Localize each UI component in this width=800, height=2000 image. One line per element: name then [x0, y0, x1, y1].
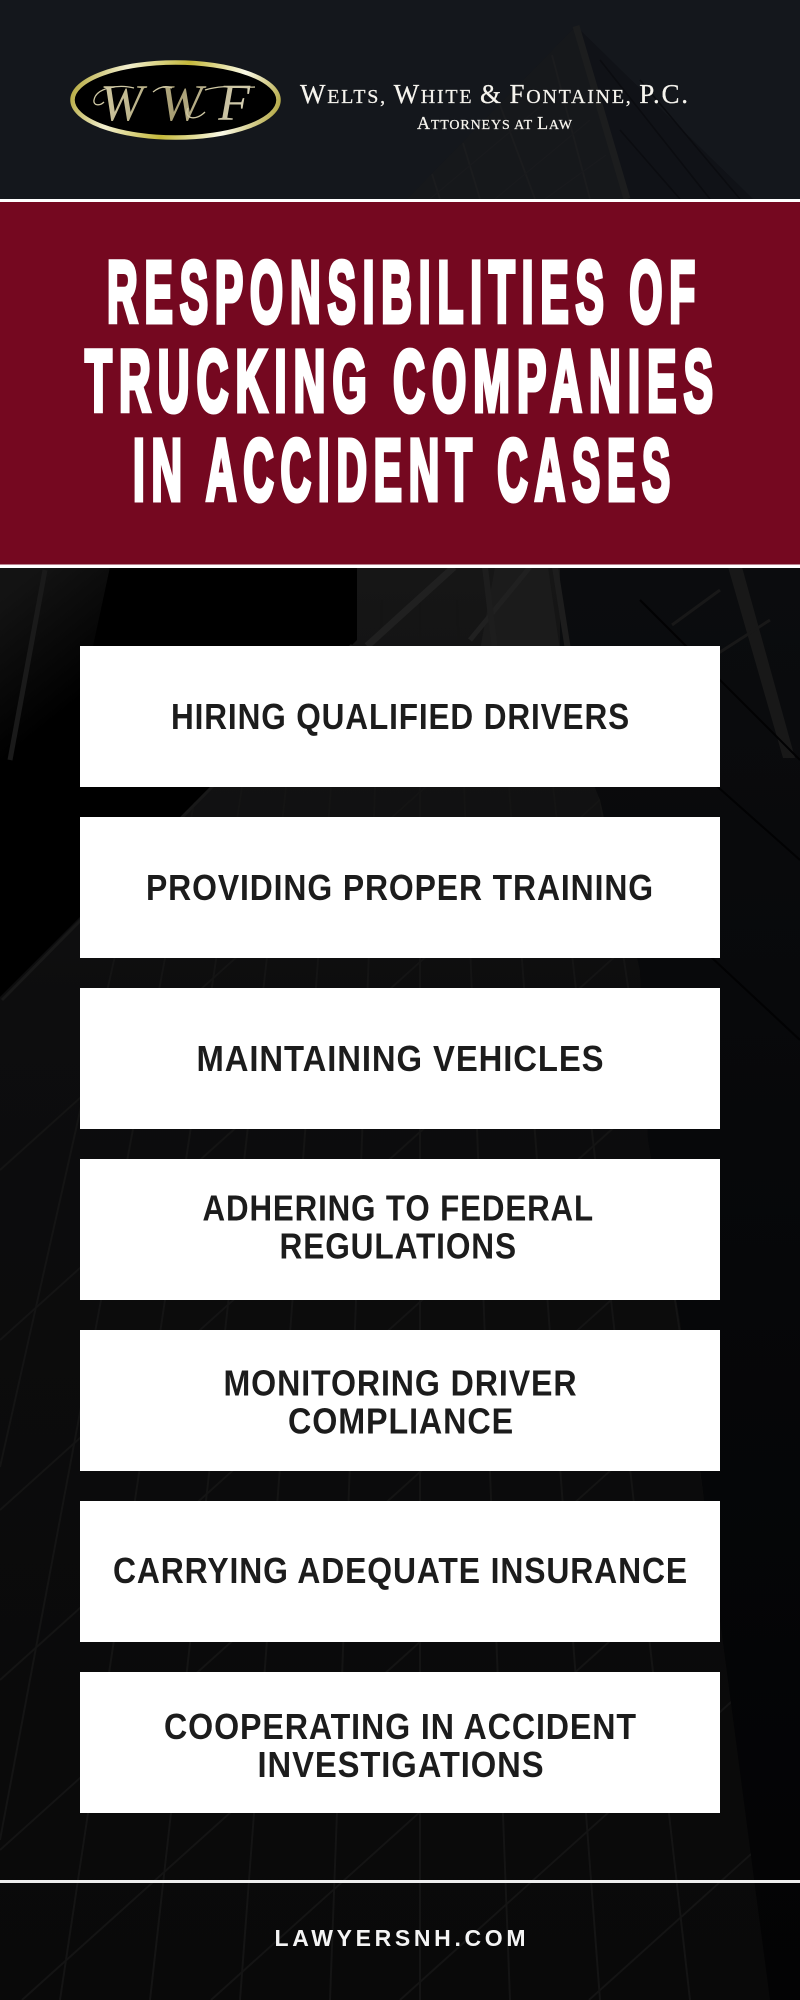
card: adhering to federal regulations: ADHERING TO FEDERAL	[202, 1188, 594, 1228]
card: maintaining vehicles: MAINTAINING VEHICLES	[196, 1038, 604, 1079]
card: adhering to federal regulations: REGULATIONS	[280, 1226, 517, 1266]
logo: WWF oval emblem	[72, 62, 278, 138]
card: hiring qualified drivers: HIRING QUALIFIED DRIVERS	[171, 696, 630, 737]
background: dark building photo	[0, 568, 800, 2000]
title banner	[0, 199, 800, 568]
card: cooperating in accident investigations: INVESTIGATIONS	[258, 1744, 544, 1785]
card: providing proper training: PROVIDING PROPER TRAINING	[146, 867, 654, 908]
title text	[85, 244, 720, 519]
card: monitoring driver compliance	[80, 1330, 720, 1471]
card: adhering to federal regulations	[80, 1159, 720, 1300]
card: hiring qualified drivers	[80, 646, 720, 787]
card: carrying adequate insurance	[80, 1501, 720, 1642]
card: cooperating in accident investigations	[80, 1672, 720, 1813]
card: carrying adequate insurance: CARRYING ADEQUATE INSURANCE	[113, 1550, 688, 1591]
header background with faint tower	[0, 0, 800, 199]
card: cooperating in accident investigations: COOPERATING IN ACCIDENT	[164, 1706, 637, 1747]
card: monitoring driver compliance: MONITORING DRIVER	[224, 1362, 578, 1404]
footer website: LAWYERSNH.COM	[274, 1925, 526, 1951]
card: monitoring driver compliance: COMPLIANCE	[288, 1400, 514, 1442]
card: maintaining vehicles	[80, 988, 720, 1129]
firm name: WELTS, WHITE & FONTAINE, P.C.	[300, 79, 688, 109]
card: providing proper training	[80, 817, 720, 958]
logo monogram: WWF	[100, 75, 251, 132]
firm tagline: ATTORNEYS AT LAW	[417, 113, 573, 133]
